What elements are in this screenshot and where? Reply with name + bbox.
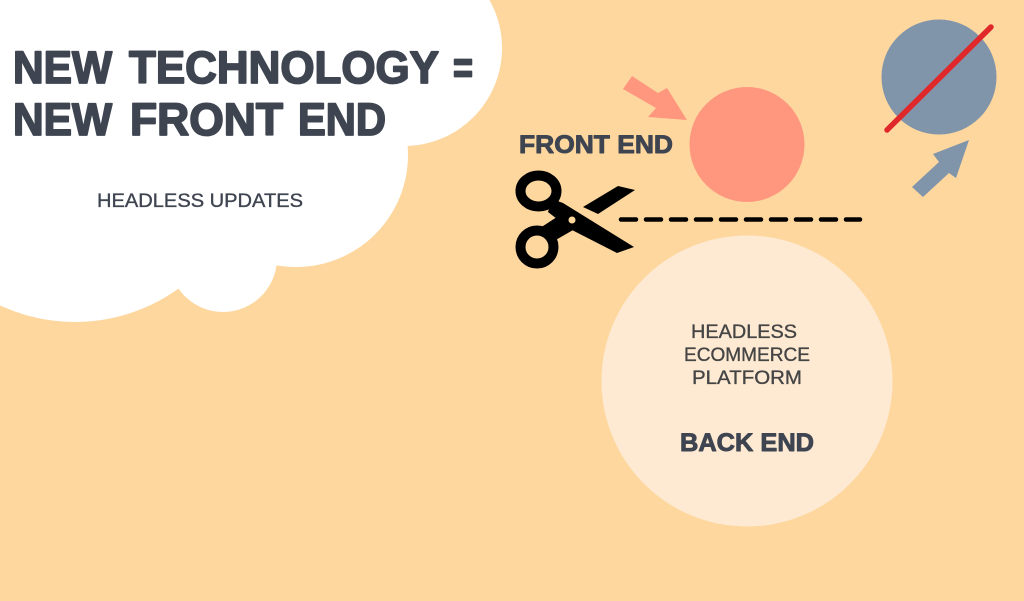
text: headless ecommerce platform: PLATFORM (692, 367, 802, 389)
title: TECHNOLOGY (129, 42, 439, 93)
title: END (298, 94, 386, 145)
text: headless ecommerce platform: HEADLESS (691, 321, 797, 343)
label: back end: BACK END (680, 429, 814, 457)
dashed cut line (621, 217, 860, 222)
title (13, 42, 473, 145)
arrow: salmon pointing to front end (623, 76, 687, 120)
text: headless ecommerce platform: ECOMMERCE (684, 344, 810, 366)
front end circle (690, 87, 804, 202)
title: NEW (13, 42, 112, 93)
back end circle (602, 236, 892, 526)
panel: white cloud (0, 0, 502, 322)
label: front end: FRONT END (519, 131, 673, 159)
title: = (453, 42, 473, 93)
subtitle: headless updates: HEADLESS UPDATES (97, 190, 303, 212)
title: NEW (13, 94, 112, 145)
icon: scissors (520, 176, 635, 264)
arrow: blue pointing to old front end (912, 140, 969, 197)
old front end circle crossed out (882, 20, 996, 134)
text: headless ecommerce platform (684, 321, 810, 389)
title: FRONT (130, 94, 283, 145)
